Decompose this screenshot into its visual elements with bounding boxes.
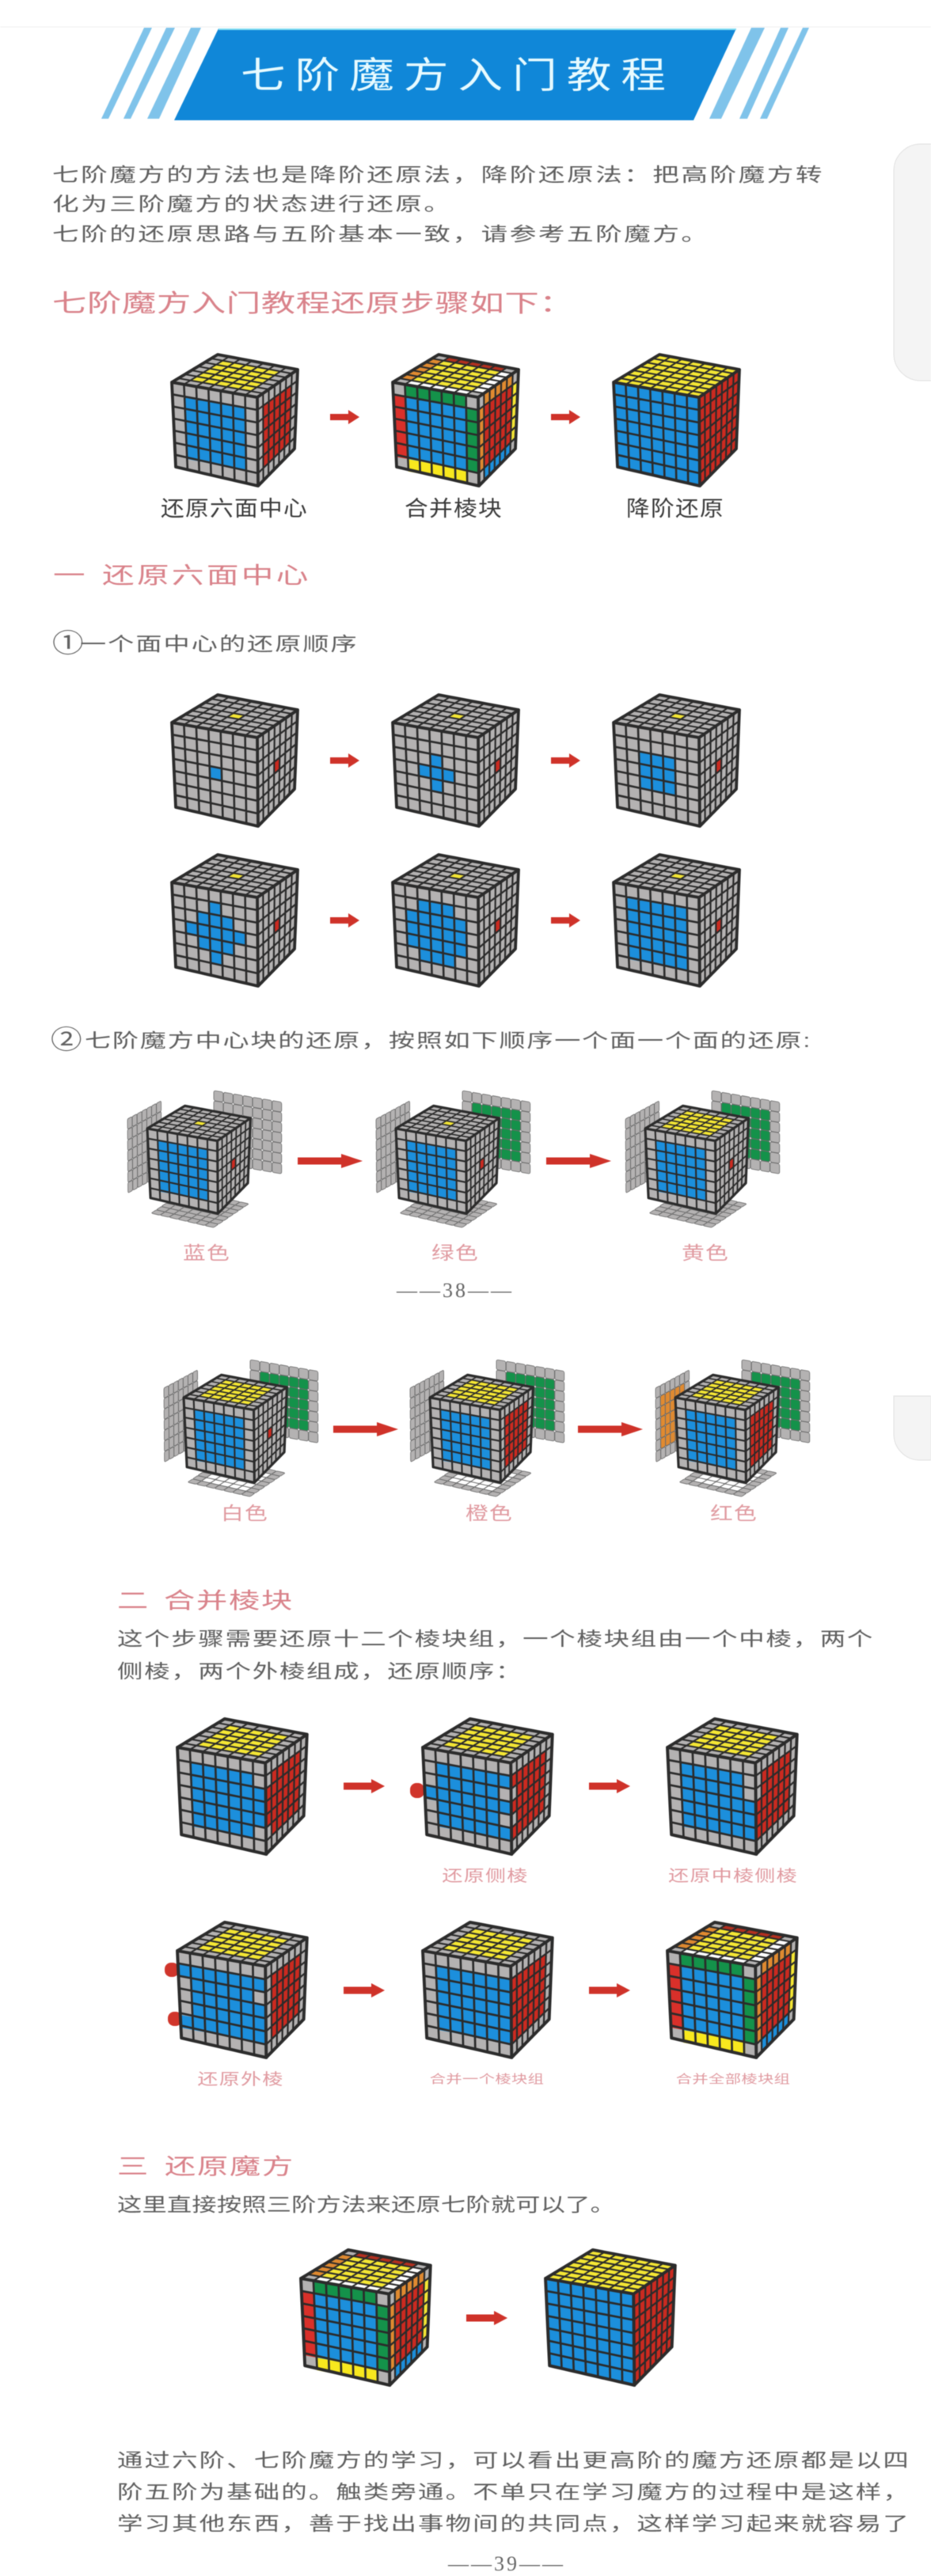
title text: 七阶魔方入门教程 — [241, 55, 675, 96]
arrow — [333, 1422, 398, 1436]
section two paragraph — [117, 1629, 874, 1683]
exploded labels row 2: 白色 — [221, 1503, 268, 1523]
edge cube 2 with side edge piece — [410, 1719, 553, 1854]
edge labels row 1: 还原侧棱 — [442, 1867, 529, 1884]
center sequence cube 1 — [172, 695, 298, 826]
sub heading one: ① — [52, 628, 85, 658]
edge cube 4 with outer edge pieces — [165, 1922, 307, 2058]
heading: section two: 合并棱块 — [164, 1588, 294, 1614]
center sequence cube 4 — [172, 855, 298, 986]
arrow — [546, 1154, 611, 1168]
heading: section one: 一 — [53, 563, 88, 589]
side panel: lower scroll tab — [894, 1396, 931, 1460]
sub heading two: ② — [51, 1025, 83, 1054]
closing paragraph: 学习其他东西，善于找出事物间的共同点，这样学习起来就容易了 — [117, 2513, 910, 2535]
intro paragraph: 七阶魔方的方法也是降阶还原法，降阶还原法：把高阶魔方转 — [52, 165, 824, 186]
section two paragraph: 侧棱，两个外棱组成，还原顺序： — [117, 1661, 522, 1683]
edge labels row 1: 还原中棱侧棱 — [668, 1867, 798, 1884]
center sequence cube 5 — [393, 855, 519, 986]
exploded labels row 1 — [183, 1242, 729, 1263]
arrow — [330, 913, 359, 928]
closing paragraph: 阶五阶为基础的。触类旁通。不单只在学习魔方的过程中是这样， — [117, 2482, 910, 2503]
heading: section two: 二 — [117, 1588, 150, 1614]
edge labels row 2: 合并一个棱块组 — [430, 2073, 544, 2085]
edge labels row 2: 还原外棱 — [197, 2070, 284, 2088]
section three paragraph: 这里直接按照三阶方法来还原七阶就可以了。 — [117, 2194, 615, 2215]
heading: section three: 三 — [117, 2154, 150, 2180]
section two paragraph: 这个步骤需要还原十二个棱块组，一个棱块组由一个中棱，两个 — [117, 1629, 874, 1650]
sub heading two: 七阶魔方中心块的还原，按照如下顺序一个面一个面的还原: — [85, 1030, 811, 1052]
sub heading one — [52, 628, 359, 658]
arrow — [551, 410, 580, 424]
center sequence cube 3 — [614, 695, 739, 826]
exploded cube: yellow — [625, 1091, 780, 1227]
heading: section one: 还原六面中心 — [102, 563, 311, 589]
arrow — [578, 1422, 643, 1436]
heading: section three: 还原魔方 — [165, 2154, 294, 2180]
edge cube 1 — [177, 1719, 307, 1854]
arrow — [551, 913, 580, 928]
arrow — [344, 1983, 385, 1997]
exploded cube: blue — [127, 1091, 282, 1227]
closing paragraph — [117, 2450, 910, 2535]
arrow — [330, 753, 359, 768]
edge cube 3 — [667, 1719, 797, 1854]
exploded cube: white — [164, 1360, 318, 1497]
side panel: upper scroll tab — [894, 144, 931, 381]
overview labels: 还原六面中心 — [161, 497, 308, 522]
arrow — [298, 1154, 363, 1168]
arrow — [589, 1983, 630, 1997]
overview labels: 降阶还原 — [626, 497, 724, 522]
page number 38: ——38—— — [396, 1279, 514, 1302]
overview cube: centers solved — [172, 355, 298, 486]
exploded cube: green — [376, 1091, 530, 1227]
edge labels row 2: 合并全部棱块组 — [676, 2073, 790, 2085]
arrow — [466, 2311, 507, 2325]
arrow — [344, 1779, 385, 1793]
final cube merged — [301, 2250, 431, 2385]
arrow — [551, 753, 580, 768]
edge cube 5 — [423, 1922, 553, 2058]
arrow — [330, 410, 359, 424]
intro paragraph: 七阶的还原思路与五阶基本一致，请参考五阶魔方。 — [52, 224, 710, 245]
arrow — [589, 1779, 630, 1793]
sub heading two — [51, 1025, 811, 1054]
intro paragraph: 化为三阶魔方的状态进行还原。 — [52, 194, 453, 215]
edge cube 6 merged — [667, 1922, 797, 2058]
title banner — [101, 28, 809, 120]
overview cube: solved — [614, 355, 739, 486]
edge labels row 2 — [197, 2070, 790, 2088]
sub heading one: 一个面中心的还原顺序 — [80, 634, 359, 655]
overview labels — [161, 497, 724, 522]
exploded labels row 1: 绿色 — [431, 1242, 479, 1263]
exploded cube: orange — [410, 1360, 564, 1497]
center sequence cube 2 — [393, 695, 519, 826]
final cube solved — [545, 2250, 675, 2385]
edge labels row 1 — [442, 1867, 798, 1884]
exploded cube: red — [656, 1360, 810, 1497]
exploded labels row 2: 红色 — [710, 1503, 758, 1523]
heading: overview steps: 七阶魔方入门教程还原步骤如下： — [52, 290, 574, 317]
closing paragraph: 通过六阶、七阶魔方的学习，可以看出更高阶的魔方还原都是以四 — [117, 2450, 910, 2472]
overview cube: edges merged — [393, 355, 519, 486]
center sequence cube 6 — [614, 855, 739, 986]
exploded labels row 1: 蓝色 — [183, 1242, 230, 1263]
overview labels: 合并棱块 — [405, 497, 503, 522]
page number 39: ——39—— — [447, 2552, 565, 2575]
exploded labels row 1: 黄色 — [682, 1242, 729, 1263]
exploded labels row 2 — [221, 1503, 758, 1523]
intro paragraph — [52, 165, 824, 245]
exploded labels row 2: 橙色 — [466, 1503, 513, 1523]
